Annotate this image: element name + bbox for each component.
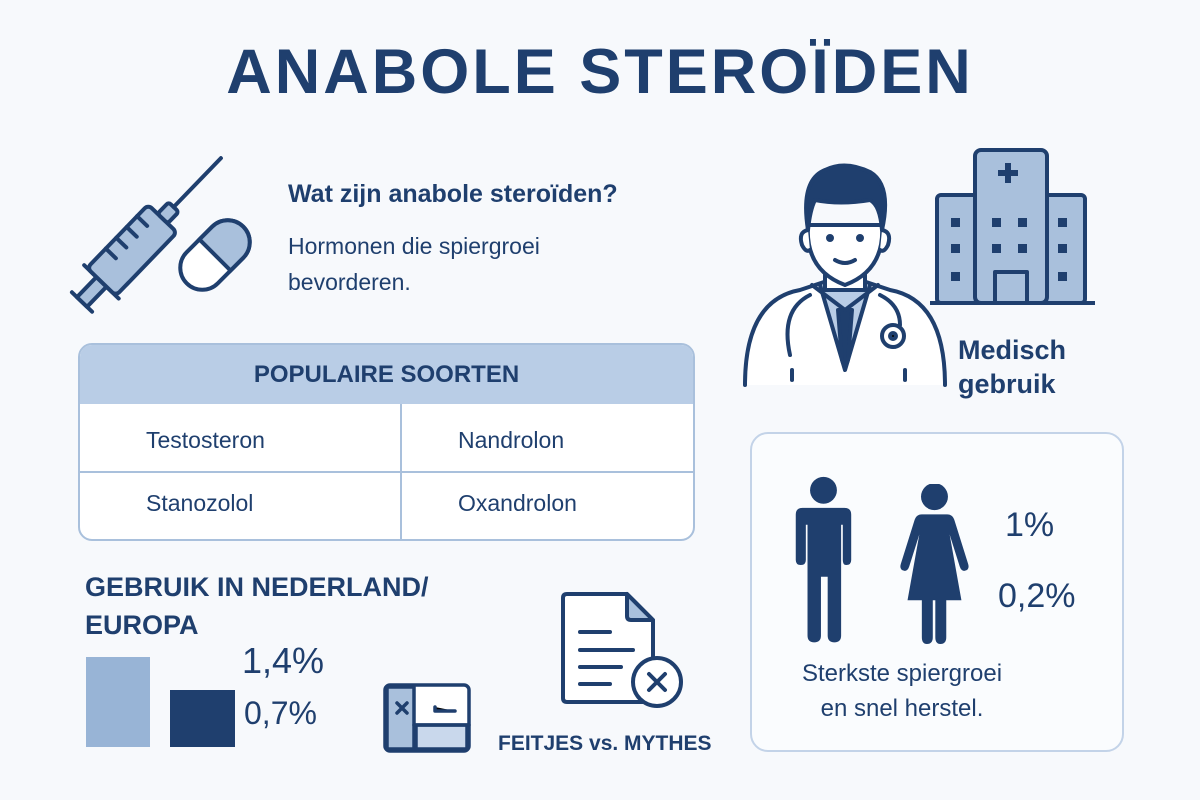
effect text xyxy=(802,660,1002,722)
type: Oxandrolon: Oxandrolon xyxy=(458,490,577,516)
panel: popular types table xyxy=(78,343,695,541)
usage heading: GEBRUIK IN NEDERLAND/ xyxy=(85,572,429,602)
table header: POPULAIRE SOORTEN xyxy=(254,361,519,388)
title: ANABOLE STEROÏDEN xyxy=(226,37,974,107)
medical use label: gebruik xyxy=(958,369,1056,399)
effect text: Sterkste spiergroei xyxy=(802,660,1002,687)
icon: man xyxy=(796,476,852,642)
value: 1,4%: 1,4% xyxy=(242,640,324,681)
value: 0,7%: 0,7% xyxy=(244,695,317,731)
icon: syringe and pill xyxy=(70,156,252,314)
question heading: Wat zijn anabole steroïden? xyxy=(288,180,618,208)
icon: doctor xyxy=(743,164,947,387)
type: Stanozolol: Stanozolol xyxy=(146,490,253,516)
panel: gender usage xyxy=(750,432,1124,752)
icon: fact/myth card xyxy=(383,683,471,753)
facts vs myths label: FEITJES vs. MYTHES xyxy=(498,732,712,755)
bar: 1,4% xyxy=(86,657,150,747)
table header xyxy=(80,345,693,404)
medical use label: Medisch xyxy=(958,335,1066,365)
definition text: bevorderen. xyxy=(288,269,411,295)
usage heading xyxy=(85,572,429,640)
stat: women 0,2%: 0,2% xyxy=(998,577,1076,615)
bar chart xyxy=(86,640,324,747)
usage heading: EUROPA xyxy=(85,610,199,640)
type: Nandrolon: Nandrolon xyxy=(458,427,564,453)
icon: document with x xyxy=(561,592,683,708)
medical use label xyxy=(958,335,1066,399)
stat: men 1%: 1% xyxy=(1005,506,1054,544)
icon: woman xyxy=(900,484,969,644)
effect text: en snel herstel. xyxy=(821,695,983,722)
definition text: Hormonen die spiergroei xyxy=(288,233,540,259)
bar: 0,7% xyxy=(170,690,235,747)
icon: hospital xyxy=(930,148,1095,305)
type: Testosteron: Testosteron xyxy=(146,427,265,453)
definition text xyxy=(288,233,540,295)
